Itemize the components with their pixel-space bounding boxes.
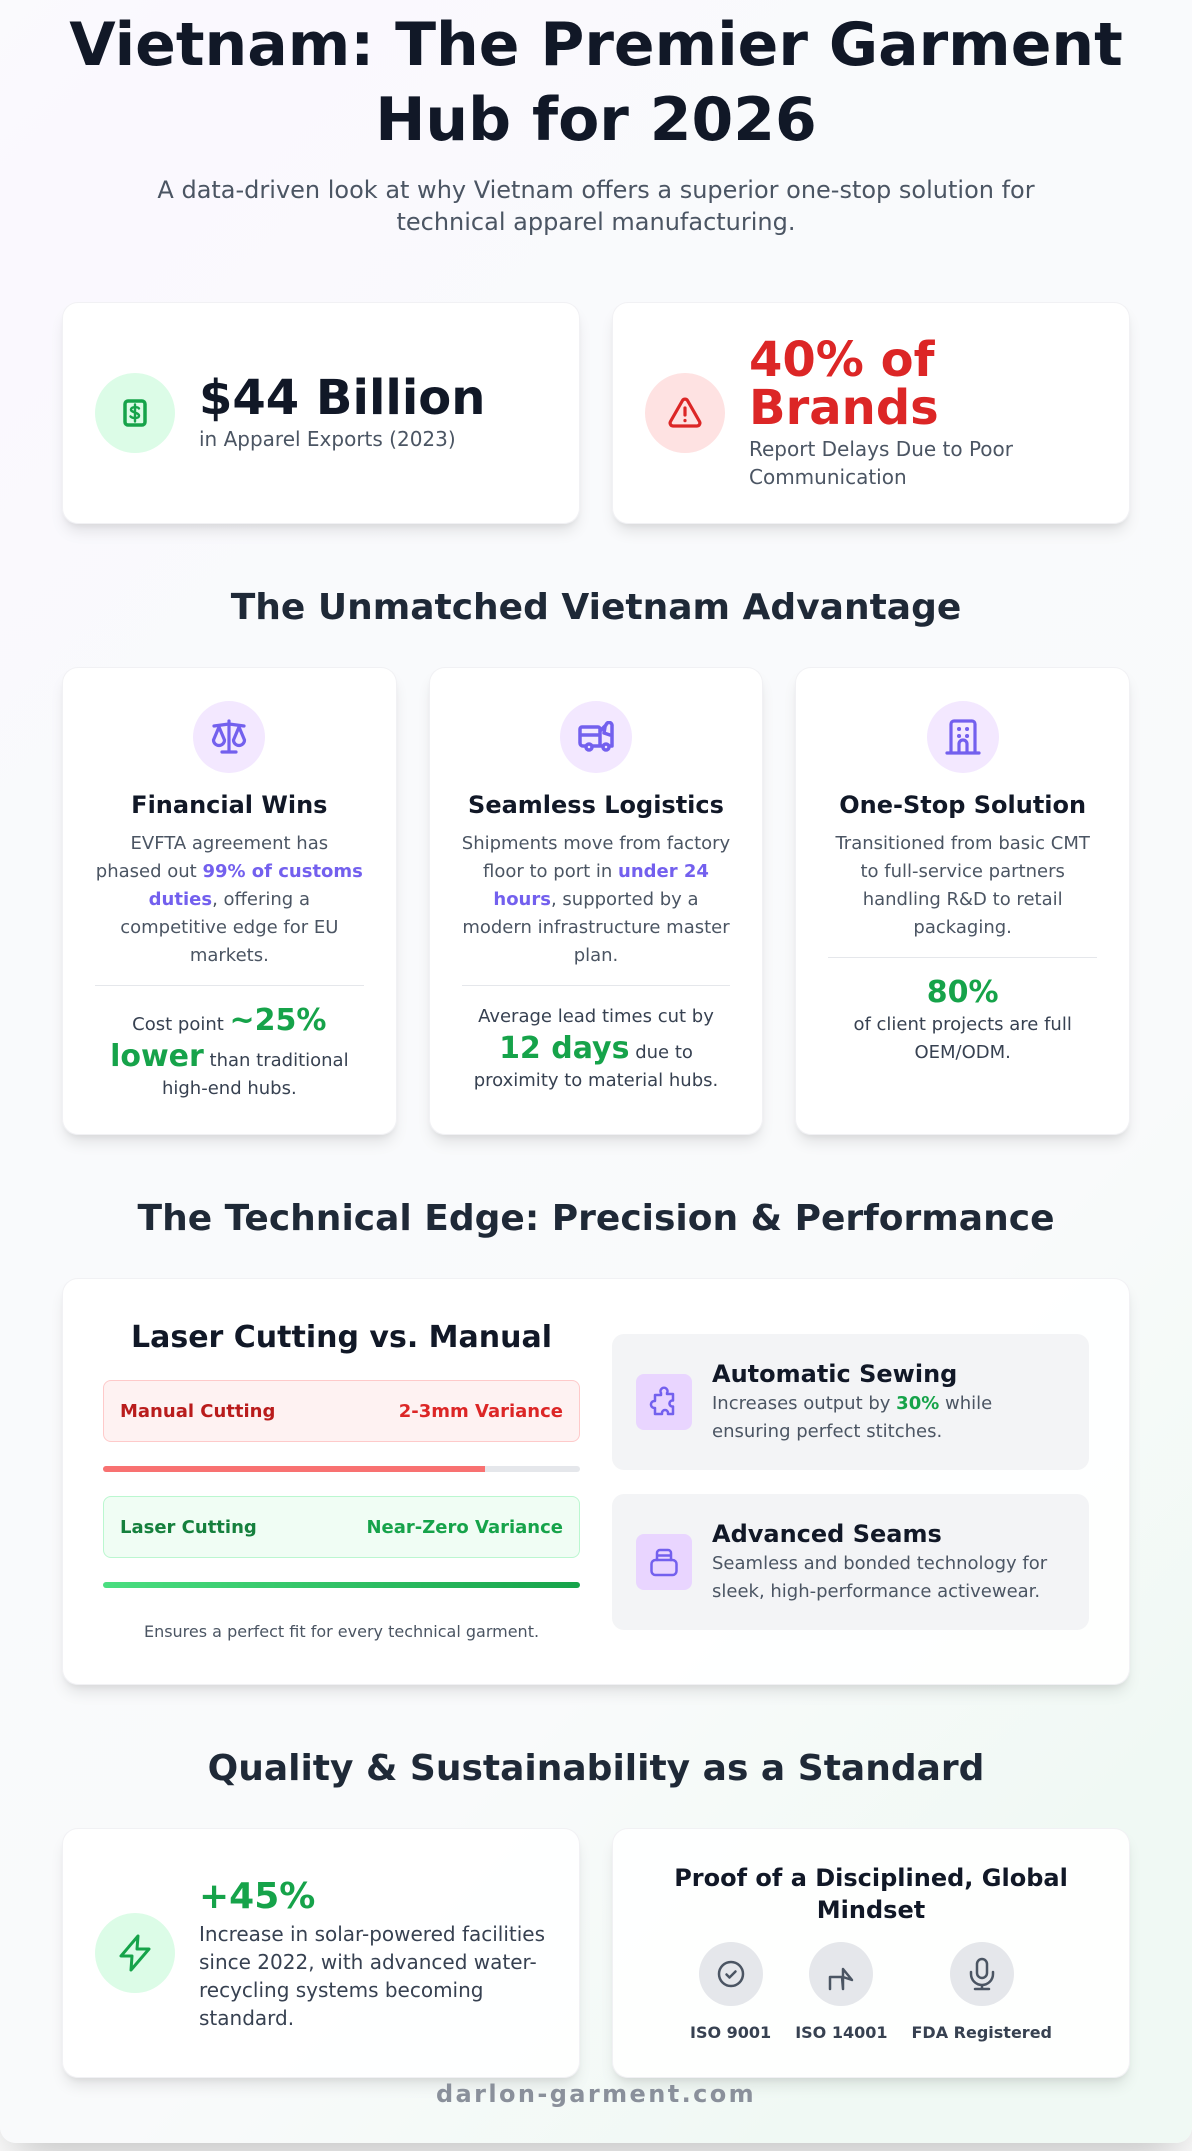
- bar: laser variance: [103, 1582, 580, 1588]
- stat text: $44 Billion: [199, 370, 485, 426]
- box text: Automatic Sewing: [712, 1360, 957, 1388]
- row: manual cutting: [103, 1380, 580, 1442]
- panel: solar stat: [62, 1828, 580, 2078]
- box text: Seamless and bonded technology for sleek, high-performance activewear.: [712, 1553, 1047, 1602]
- icon: puzzle: [636, 1374, 692, 1430]
- card text: plan.: [574, 944, 618, 966]
- stat text: Increase in solar-powered facilities since 2022, with advanced water-recycling systems becoming standard.: [199, 1922, 545, 2030]
- caption: Ensures a perfect fit for every technical garment.: [144, 1622, 539, 1641]
- panel: one-stop solution: [795, 667, 1130, 1135]
- card stat: Cost point ~25% lower than traditional high-end hubs.: [110, 1002, 349, 1098]
- stat text: 40% of Brands: [749, 332, 939, 436]
- subtitle: A data-driven look at why Vietnam offers a superior one-stop solution for technical apparel manufacturing.: [157, 176, 1035, 236]
- card text: floor to port in under 24: [483, 860, 709, 882]
- card text: EVFTA agreement has phased out 99% of customs duties, offering a competitive edge for EU markets.: [96, 832, 363, 966]
- title: [69, 10, 1123, 155]
- row: manual cutting: Manual Cutting: [120, 1401, 275, 1422]
- cert: iso 9001: [690, 1942, 771, 2042]
- stat text: [199, 370, 485, 451]
- icon: warning triangle: [645, 373, 725, 453]
- title: Vietnam: The Premier Garment: [69, 10, 1123, 80]
- icon: stacked layers: [636, 1534, 692, 1590]
- panel: exports stat: [62, 302, 580, 524]
- box text: [712, 1520, 1048, 1602]
- stat text: +45%: [199, 1876, 315, 1917]
- certification list: [690, 1942, 1052, 2042]
- heading: laser vs manual: Laser Cutting vs. Manual: [131, 1320, 552, 1355]
- card text: Transitioned from basic CMT to full-service partners handling R&D to retail packaging.: [835, 832, 1090, 938]
- cert: iso 14001: ISO 14001: [795, 2023, 888, 2042]
- panel: seamless logistics: [429, 667, 763, 1135]
- panel: certifications: [612, 1828, 1130, 2078]
- box text: Increases output by 30% while ensuring perfect stitches.: [712, 1393, 992, 1442]
- card stat: 80%: [927, 974, 999, 1010]
- card heading: Proof of a Disciplined, Global Mindset: [674, 1864, 1068, 1924]
- card text: modern infrastructure master: [462, 916, 730, 938]
- icon: bolt: [95, 1913, 175, 1993]
- heading: technical edge: The Technical Edge: Precision & Performance: [138, 1198, 1054, 1239]
- card text: [462, 832, 730, 966]
- box text: [712, 1360, 992, 1442]
- panel: technical edge: [62, 1278, 1130, 1685]
- icon: scales: [193, 701, 265, 773]
- icon: building: [927, 701, 999, 773]
- card heading: Financial Wins: [131, 791, 327, 819]
- row: laser cutting: Near-Zero Variance: [366, 1517, 563, 1538]
- box: automatic sewing: [612, 1334, 1089, 1470]
- cert: iso 14001: [795, 1942, 888, 2042]
- icon: truck: [560, 701, 632, 773]
- card stat: of client projects are full OEM/ODM.: [853, 1014, 1072, 1062]
- row: laser cutting: Laser Cutting: [120, 1517, 257, 1538]
- stat text: Report Delays Due to Poor Communication: [749, 437, 1013, 489]
- stat text: in Apparel Exports (2023): [199, 427, 456, 451]
- card text: hours, supported by a: [493, 888, 699, 910]
- card text: Shipments move from factory: [462, 832, 730, 854]
- icon: dollar note: [95, 373, 175, 453]
- card stat: Average lead times cut by 12 days due to proximity to material hubs.: [474, 1006, 718, 1090]
- row: manual cutting: 2-3mm Variance: [399, 1401, 563, 1422]
- card stat: [828, 957, 1097, 1066]
- heading: advantage: The Unmatched Vietnam Advantage: [231, 587, 961, 628]
- card heading: One-Stop Solution: [839, 791, 1086, 819]
- footer: website: darlon-garment.com: [436, 2080, 756, 2108]
- bar: manual variance: [103, 1466, 580, 1472]
- box: advanced seams: [612, 1494, 1089, 1630]
- panel: financial wins: [62, 667, 397, 1135]
- row: laser cutting: [103, 1496, 580, 1558]
- panel: delays stat: [612, 302, 1130, 524]
- card heading: Seamless Logistics: [468, 791, 724, 819]
- stat text: [749, 332, 1013, 489]
- cert: fda registered: FDA Registered: [912, 2023, 1052, 2042]
- cert: iso 9001: ISO 9001: [690, 2023, 771, 2042]
- title: Hub for 2026: [375, 85, 817, 155]
- heading: quality and sustainability: Quality & Sustainability as a Standard: [208, 1748, 984, 1789]
- cert: fda registered: [912, 1942, 1052, 2042]
- box text: Advanced Seams: [712, 1520, 942, 1548]
